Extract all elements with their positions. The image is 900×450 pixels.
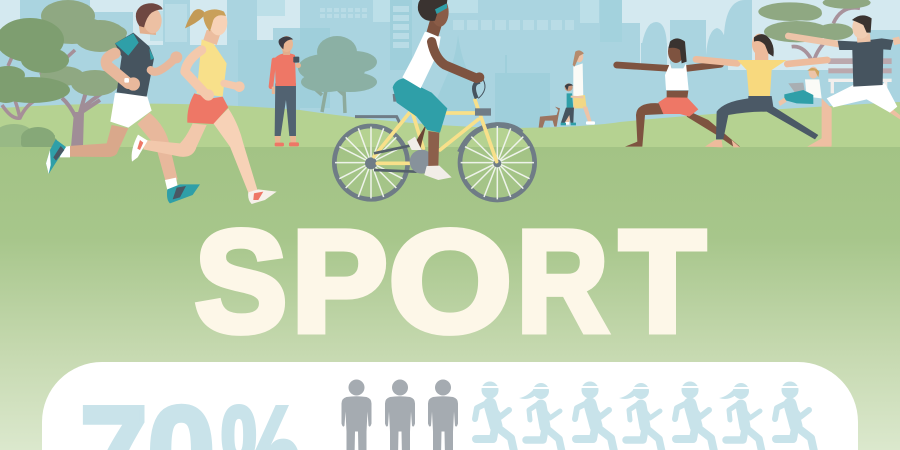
heading: SPORT: O (389, 202, 512, 362)
cyclist on bicycle (334, 0, 535, 200)
yoga woman: middle (696, 34, 832, 147)
woman, child and dog in distance (535, 50, 595, 128)
yoga man: right (788, 15, 900, 147)
runner: woman (132, 9, 277, 204)
rear wheel (334, 126, 408, 199)
frame (374, 100, 497, 163)
rear rack (355, 117, 400, 123)
right park tree and bench (758, 0, 892, 93)
arm (432, 42, 477, 78)
near shin (428, 131, 439, 167)
panel: statistic card (42, 362, 858, 450)
heading: SPORT: P (292, 201, 388, 362)
tank top (402, 32, 441, 88)
runner: man (46, 3, 200, 203)
shoe (424, 166, 452, 180)
bushes (0, 124, 57, 149)
far leg (412, 123, 427, 150)
heading: SPORT: S (195, 200, 287, 362)
hill (0, 102, 900, 148)
distant trees (298, 36, 377, 113)
left park trees (0, 0, 127, 147)
background: city skyline (0, 0, 900, 150)
teal capris (393, 78, 447, 133)
neck and head (427, 20, 443, 37)
front wheel (460, 125, 535, 200)
icons: three grey people (342, 380, 458, 450)
mudguard (458, 123, 523, 152)
seated woman with laptop (778, 67, 822, 106)
heading: SPORT: R (517, 200, 608, 362)
heading: SPORT: T (620, 201, 705, 362)
yoga woman: left (617, 38, 740, 147)
heading: SPORT (195, 200, 705, 362)
statistic: 70% (80, 379, 301, 450)
bystander with phone (271, 36, 301, 146)
ground (0, 147, 900, 450)
icons: seven active runners (475, 382, 815, 450)
saddle (393, 93, 403, 102)
